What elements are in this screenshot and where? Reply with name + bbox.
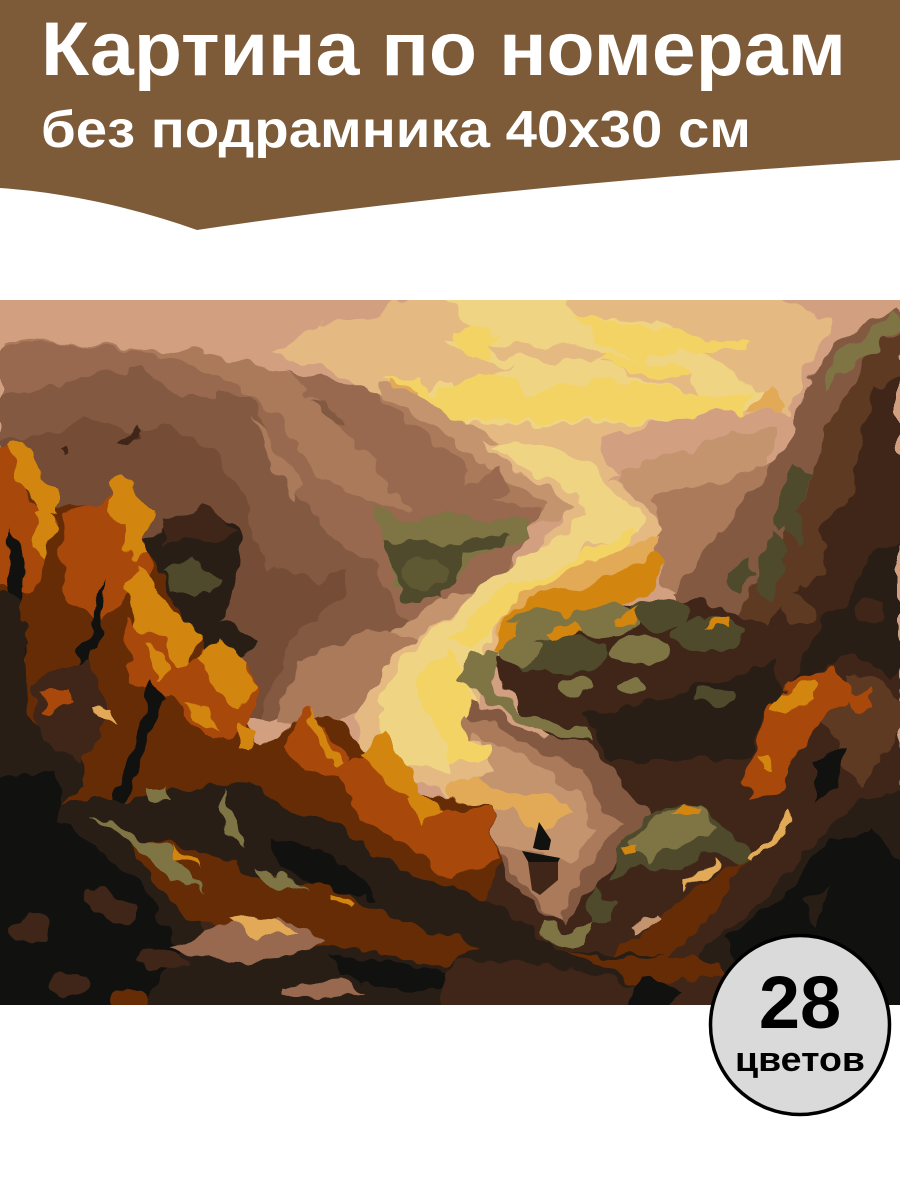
left autumn trees [0, 440, 500, 910]
subtitle: без подрамника 40х30 см [41, 101, 751, 159]
badge: colour count [710, 936, 890, 1114]
badge number: 28 [759, 961, 841, 1044]
banner header [0, 0, 900, 230]
misty lower valley [445, 699, 755, 958]
foreground right slope and autumn tree [614, 654, 900, 1005]
right cliff [673, 308, 900, 694]
lone figure on rock [522, 822, 560, 895]
title: Картина по номерам [41, 7, 846, 92]
left mountains [0, 342, 585, 730]
foreground ground [0, 705, 740, 1030]
sky [0, 300, 900, 800]
river island [372, 505, 530, 600]
badge label: цветов [735, 1041, 865, 1079]
forested promontory [456, 536, 787, 764]
painting: autumn river valley [0, 270, 900, 1040]
river [354, 441, 662, 799]
far hills right [600, 412, 795, 600]
